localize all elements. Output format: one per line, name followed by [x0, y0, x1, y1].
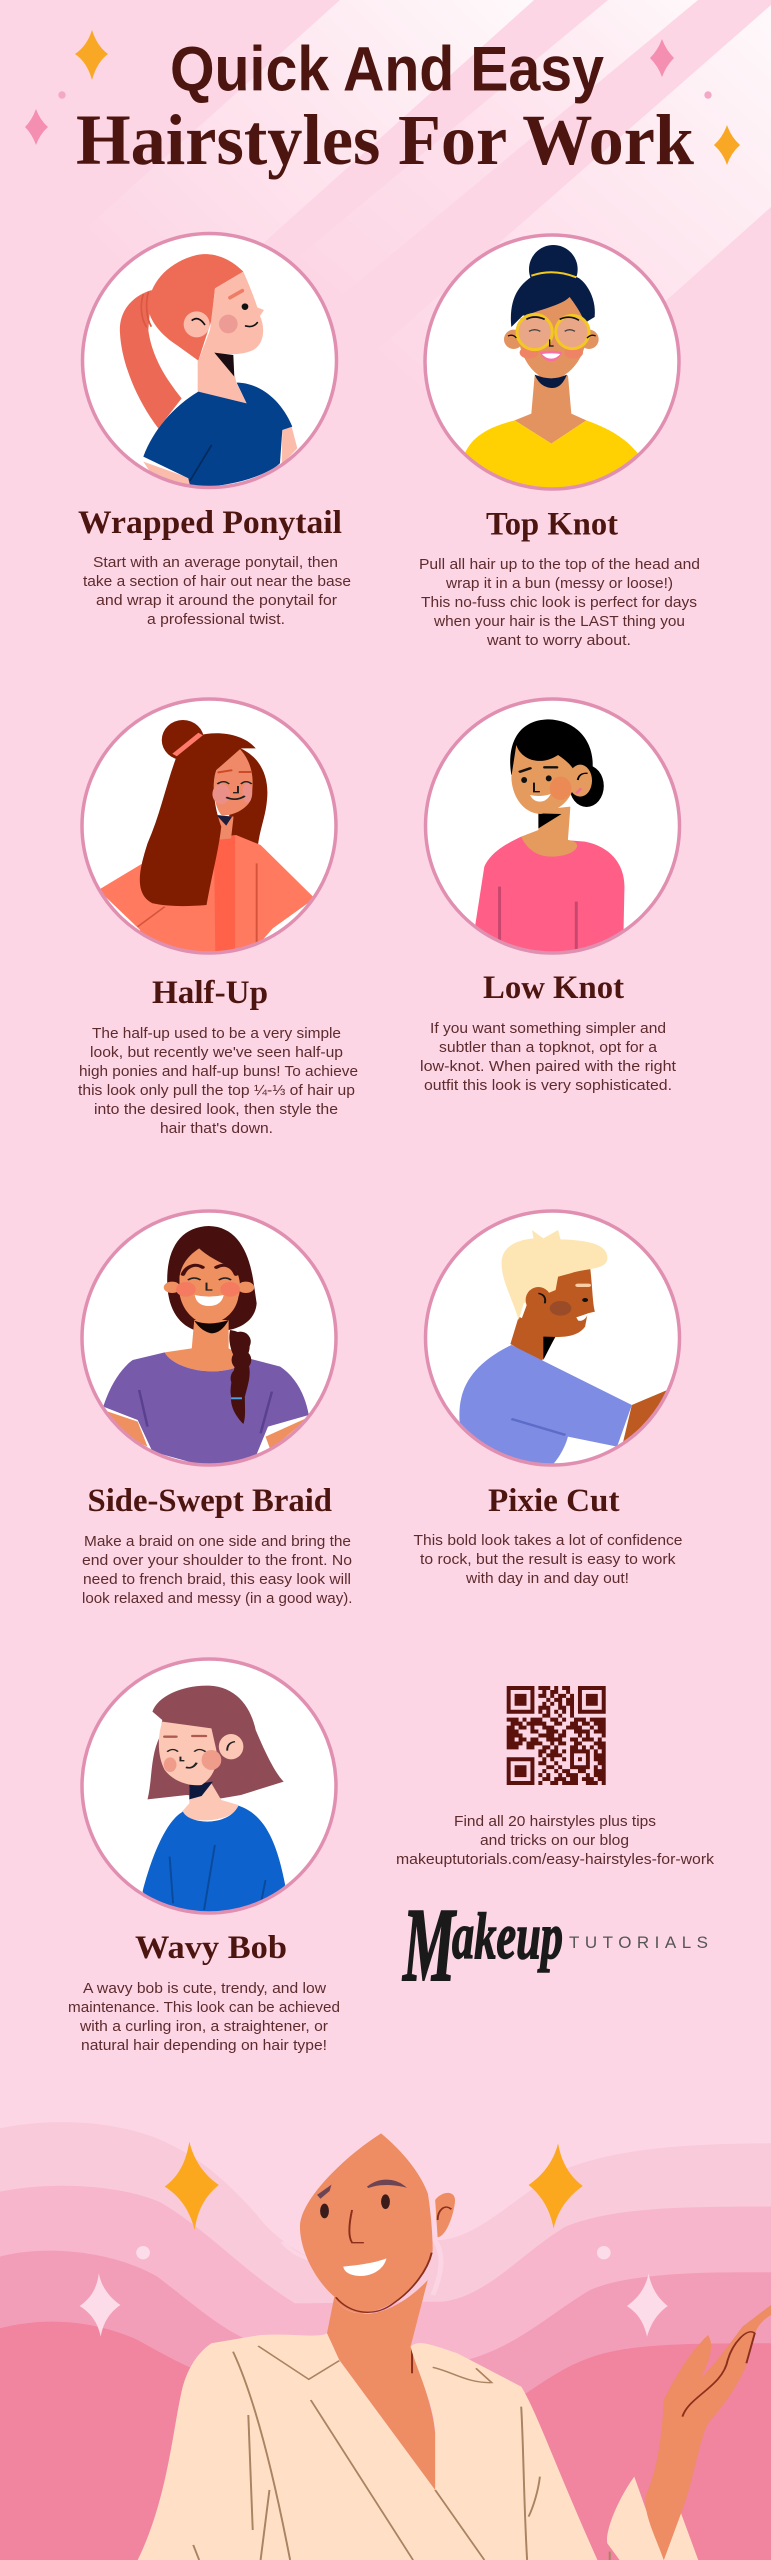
heading: top knot: Top Knot: [486, 506, 618, 542]
description: half-up: [78, 1025, 358, 1137]
description: low knot: outfit this look is very sophisticated.: [424, 1077, 672, 1094]
heading: wrapped ponytail: Wrapped Ponytail: [78, 505, 342, 541]
dots: [136, 2246, 611, 2259]
blog call to action: makeuptutorials.com/easy-hairstyles-for-work: [396, 1851, 715, 1868]
panel: wrapped ponytail: [78, 234, 351, 628]
description: half-up: this look only pull the top ¼-⅓ of hair up: [78, 1082, 355, 1099]
description: half-up: high ponies and half-up buns! To achieve: [79, 1063, 358, 1080]
panel: top knot: [419, 235, 700, 649]
description: wrapped ponytail: [83, 554, 351, 628]
description: wrapped ponytail: take a section of hair out near the base: [83, 573, 351, 590]
description: top knot: want to worry about.: [486, 632, 631, 649]
description: side-swept braid: look relaxed and messy (in a good way).: [82, 1590, 352, 1607]
description: low knot: low-knot. When paired with the right: [420, 1058, 677, 1075]
QR code: [507, 1688, 606, 1783]
description: top knot: [419, 556, 700, 649]
title: [76, 34, 694, 180]
logo: makeup tutorials: akeup: [452, 1900, 563, 1973]
description: half-up: into the desired look, then style the: [94, 1101, 338, 1118]
description: low knot: subtler than a topknot, opt for a: [439, 1039, 658, 1056]
logo: makeup tutorials: M: [402, 1886, 457, 2003]
description: top knot: wrap it in a bun (messy or loose!): [445, 575, 673, 592]
sparkle: pale left: [80, 2273, 120, 2337]
description: wavy bob: maintenance. This look can be achieved: [68, 1999, 340, 2016]
description: pixie cut: to rock, but the result is easy to work: [420, 1551, 676, 1568]
title: Quick And Easy: [170, 34, 604, 104]
description: wrapped ponytail: a professional twist.: [147, 611, 285, 628]
description: low knot: If you want something simpler and: [430, 1020, 666, 1037]
description: wrapped ponytail: Start with an average ponytail, then: [93, 554, 338, 571]
description: pixie cut: This bold look takes a lot of confidence: [414, 1532, 682, 1549]
heading: half-up: Half-Up: [152, 975, 268, 1011]
panel: wavy bob: [68, 1659, 340, 2054]
panel: side-swept braid: [82, 1211, 352, 1607]
description: pixie cut: with day in and day out!: [465, 1570, 629, 1587]
description: wrapped ponytail: and wrap it around the ponytail for: [96, 592, 337, 609]
logo: makeup tutorials: [402, 1886, 708, 2003]
blog call to action: [396, 1813, 715, 1868]
description: wavy bob: with a curling iron, a straightener, or: [79, 2018, 328, 2035]
description: side-swept braid: Make a braid on one side and bring the: [84, 1533, 351, 1550]
description: wavy bob: [68, 1980, 340, 2054]
portrait: top knot: [425, 235, 679, 492]
portrait: wavy bob: [82, 1659, 336, 1913]
portrait: wrapped ponytail: [82, 234, 336, 488]
panel: half-up: [78, 699, 358, 1137]
portrait: side-swept braid: [82, 1211, 336, 1467]
title: Hairstyles For Work: [76, 100, 694, 180]
description: top knot: This no-fuss chic look is perfect for days: [421, 594, 697, 611]
description: half-up: The half-up used to be a very simple: [92, 1025, 341, 1042]
description: side-swept braid: need to french braid, this easy look will: [83, 1571, 351, 1588]
heading: side-swept braid: Side-Swept Braid: [88, 1483, 332, 1519]
background waves: [0, 2122, 771, 2560]
logo: makeup tutorials: TUTORIALS: [569, 1933, 708, 1952]
heading: wavy bob: Wavy Bob: [135, 1930, 287, 1966]
description: side-swept braid: [82, 1533, 352, 1607]
description: low knot: [420, 1020, 677, 1094]
woman with white hair: [138, 2133, 771, 2560]
portrait: low knot: [426, 699, 680, 957]
panel: pixie cut: [414, 1211, 682, 1587]
panel: low knot: [420, 699, 680, 1094]
sparkle: orange left: [165, 2142, 219, 2230]
description: side-swept braid: end over your shoulder to the front. No: [82, 1552, 352, 1569]
description: top knot: Pull all hair up to the top of the head and: [419, 556, 700, 573]
description: wavy bob: natural hair depending on hair type!: [81, 2037, 327, 2054]
description: half-up: look, but recently we've seen half-up: [90, 1044, 343, 1061]
description: half-up: hair that's down.: [160, 1120, 273, 1137]
header sparkles: [25, 30, 740, 165]
description: pixie cut: [414, 1532, 682, 1587]
blog call to action: Find all 20 hairstyles plus tips: [454, 1813, 656, 1830]
portrait: pixie cut: [426, 1211, 680, 1470]
heading: low knot: Low Knot: [483, 970, 624, 1006]
description: top knot: when your hair is the LAST thing you: [433, 613, 685, 630]
description: wavy bob: A wavy bob is cute, trendy, and low: [83, 1980, 326, 1997]
sparkle: pale right: [627, 2273, 668, 2337]
sparkle: orange right: [529, 2143, 583, 2228]
portrait: half-up: [82, 699, 336, 957]
heading: pixie cut: Pixie Cut: [488, 1483, 620, 1519]
blog call to action: and tricks on our blog: [480, 1832, 629, 1849]
footer illustration: [0, 2122, 771, 2560]
